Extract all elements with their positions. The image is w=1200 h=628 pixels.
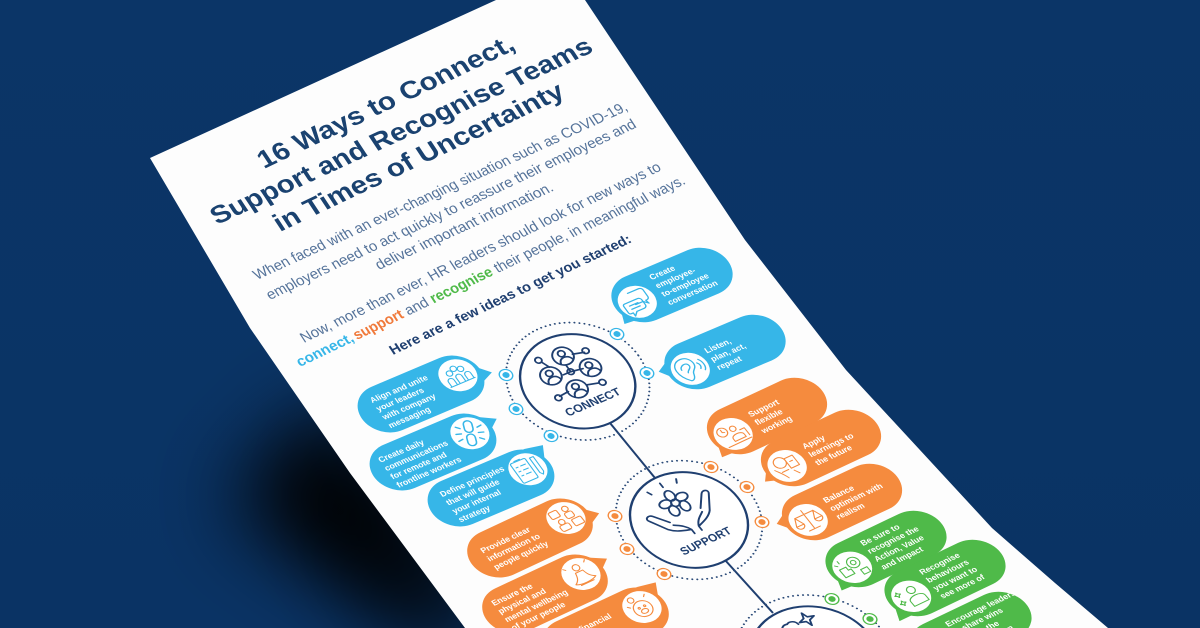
bubble: create daily communications: communications xyxy=(382,438,450,473)
bubble: create daily communications: frontline workers xyxy=(394,454,464,490)
connector: support to recognise xyxy=(725,560,773,613)
bubble: recognise behaviours xyxy=(869,531,1017,626)
bubble: ensure wellbeing: Ensure the xyxy=(489,581,535,608)
second paragraph: connect, xyxy=(293,330,357,370)
title: Support and Recognise Teams xyxy=(205,33,598,230)
icon: gear and puzzle xyxy=(833,553,871,582)
icon: piggy bank xyxy=(622,592,658,621)
bubble: apply learnings: learnings to xyxy=(806,431,856,459)
icon: network of people xyxy=(528,338,614,406)
hub: support xyxy=(587,440,791,600)
nodes: support ring xyxy=(606,460,771,581)
bubble: provide clear information xyxy=(456,487,612,586)
intro paragraph: When faced with an ever-changing situation such as COVID-19, xyxy=(250,99,631,283)
bubble: create daily communications: Create daily xyxy=(376,437,426,464)
bubble: listen plan act repeat: Listen, xyxy=(702,336,733,355)
bubble: create employee conversation: Create xyxy=(647,263,677,282)
icon: people exchanging information xyxy=(548,503,585,532)
bubble: recognise action value impact: Be sure to xyxy=(858,522,902,548)
bubble: recognise action value impact: and Impact xyxy=(878,545,925,571)
bubble: align and unite: your leaders xyxy=(374,385,426,413)
icon: scales xyxy=(788,505,828,534)
bubble: create employee conversation xyxy=(598,240,744,331)
bubble: recognise action value impact: recognise the xyxy=(865,524,921,556)
icon: clipboard and pencil xyxy=(509,454,546,484)
bubble: provide clear information: information to xyxy=(485,531,542,563)
connector: connect to support xyxy=(610,423,655,478)
bubble: define principles: Define principles xyxy=(438,464,507,499)
bubble: ensure wellbeing xyxy=(471,542,627,628)
bubble: apply learnings: Apply xyxy=(800,433,827,451)
hub label: support: SUPPORT xyxy=(677,524,735,558)
icon: hands holding flower xyxy=(629,469,729,546)
hub: connect xyxy=(479,303,677,460)
second paragraph: support xyxy=(350,306,407,343)
bubble: balance optimism: realism xyxy=(834,501,867,521)
bubble: recognise action value impact: Action, Value xyxy=(872,533,926,563)
bubble: define principles: your internal xyxy=(450,487,503,516)
bubble: support flexible working: flexible xyxy=(752,407,785,427)
bubble: support flexible working: Support xyxy=(746,397,781,419)
second paragraph: their people, in meaningful ways. xyxy=(491,173,689,276)
bubble: support flexible working xyxy=(694,369,839,464)
icon: ear with sound waves xyxy=(671,353,710,384)
icon: broken chain xyxy=(453,420,487,447)
ideas heading: Here are a few ideas to get you started: xyxy=(386,231,634,357)
icon: clock and remote worker xyxy=(715,420,752,448)
icon: recognition star and cloud xyxy=(777,610,819,628)
second paragraph: recognise xyxy=(426,264,496,307)
bubble: define principles xyxy=(416,439,570,535)
icon: meditating person xyxy=(563,560,599,588)
bubble: define principles: that will guide xyxy=(444,477,502,507)
paper sheet xyxy=(150,0,1108,628)
nodes: recognise ring xyxy=(822,592,880,626)
bubble: provide clear information: Provide clear xyxy=(478,525,533,555)
title: in Times of Uncertainty xyxy=(268,77,570,237)
second paragraph: and xyxy=(401,294,432,319)
bubble: align and unite: Align and unite xyxy=(368,373,430,405)
bubble: recognise behaviours: Recognise xyxy=(917,550,962,577)
icon: person with stars xyxy=(892,584,929,611)
bubble: encourage leaders: Encourage leaders xyxy=(943,588,1018,628)
bubble: recognise behaviours: see more of xyxy=(937,572,987,600)
bubble: balance optimism: optimism with xyxy=(827,481,885,513)
bubble: balance optimism: Balance xyxy=(821,483,856,505)
bubble: create employee conversation: conversation xyxy=(665,278,720,307)
icon: group of people xyxy=(440,361,475,387)
bubble: ensure wellbeing: physical and xyxy=(496,586,548,616)
bubble: create daily communications: for remote and xyxy=(388,450,449,481)
paper shadow near edge xyxy=(320,440,480,628)
bubble: apply learnings xyxy=(744,401,893,497)
title: 16 Ways to Connect, xyxy=(252,31,520,174)
hub: recognise xyxy=(705,573,925,628)
bubble: align and unite: messaging xyxy=(386,405,433,430)
bubble: create daily communications xyxy=(358,402,516,499)
paper shadow xyxy=(225,400,490,620)
icon: learning head xyxy=(768,452,804,481)
bubble: listen plan act repeat: plan, act, xyxy=(708,341,748,363)
icon: speech bubbles xyxy=(617,288,656,318)
bubble: align and unite xyxy=(346,344,503,441)
nodes: connect ring xyxy=(497,327,656,443)
bubble: create employee conversation: employee- xyxy=(653,266,698,290)
bubble: listen plan act repeat: repeat xyxy=(714,354,744,372)
bubble: apply learnings: the future xyxy=(813,443,854,467)
bubble: recognise action value impact xyxy=(812,502,958,597)
bubble: listen plan act repeat xyxy=(648,307,797,400)
bubble: create employee conversation: to-employee xyxy=(659,271,711,298)
intro paragraph: employers need to act quickly to reassure their employees and xyxy=(263,116,640,303)
intro paragraph: deliver important information. xyxy=(372,179,557,273)
bubble: recognise behaviours: behaviours xyxy=(924,557,971,585)
bubble: balance optimism xyxy=(765,455,914,551)
hub label: connect: CONNECT xyxy=(562,385,624,419)
bubble: align and unite: with company xyxy=(379,391,438,422)
bubble: financial support xyxy=(532,577,685,628)
bubble: define principles: strategy xyxy=(456,503,492,524)
second paragraph: Now, more than ever, HR leaders should look for new ways to xyxy=(297,159,664,346)
bubble: support flexible working: working xyxy=(758,414,794,436)
bubble: ensure wellbeing: mental wellbeing xyxy=(502,587,570,624)
bubble: encourage leaders xyxy=(899,583,1043,628)
bubble: recognise behaviours: you want to xyxy=(931,565,979,592)
bubble: provide clear information: people quickly xyxy=(491,539,551,571)
